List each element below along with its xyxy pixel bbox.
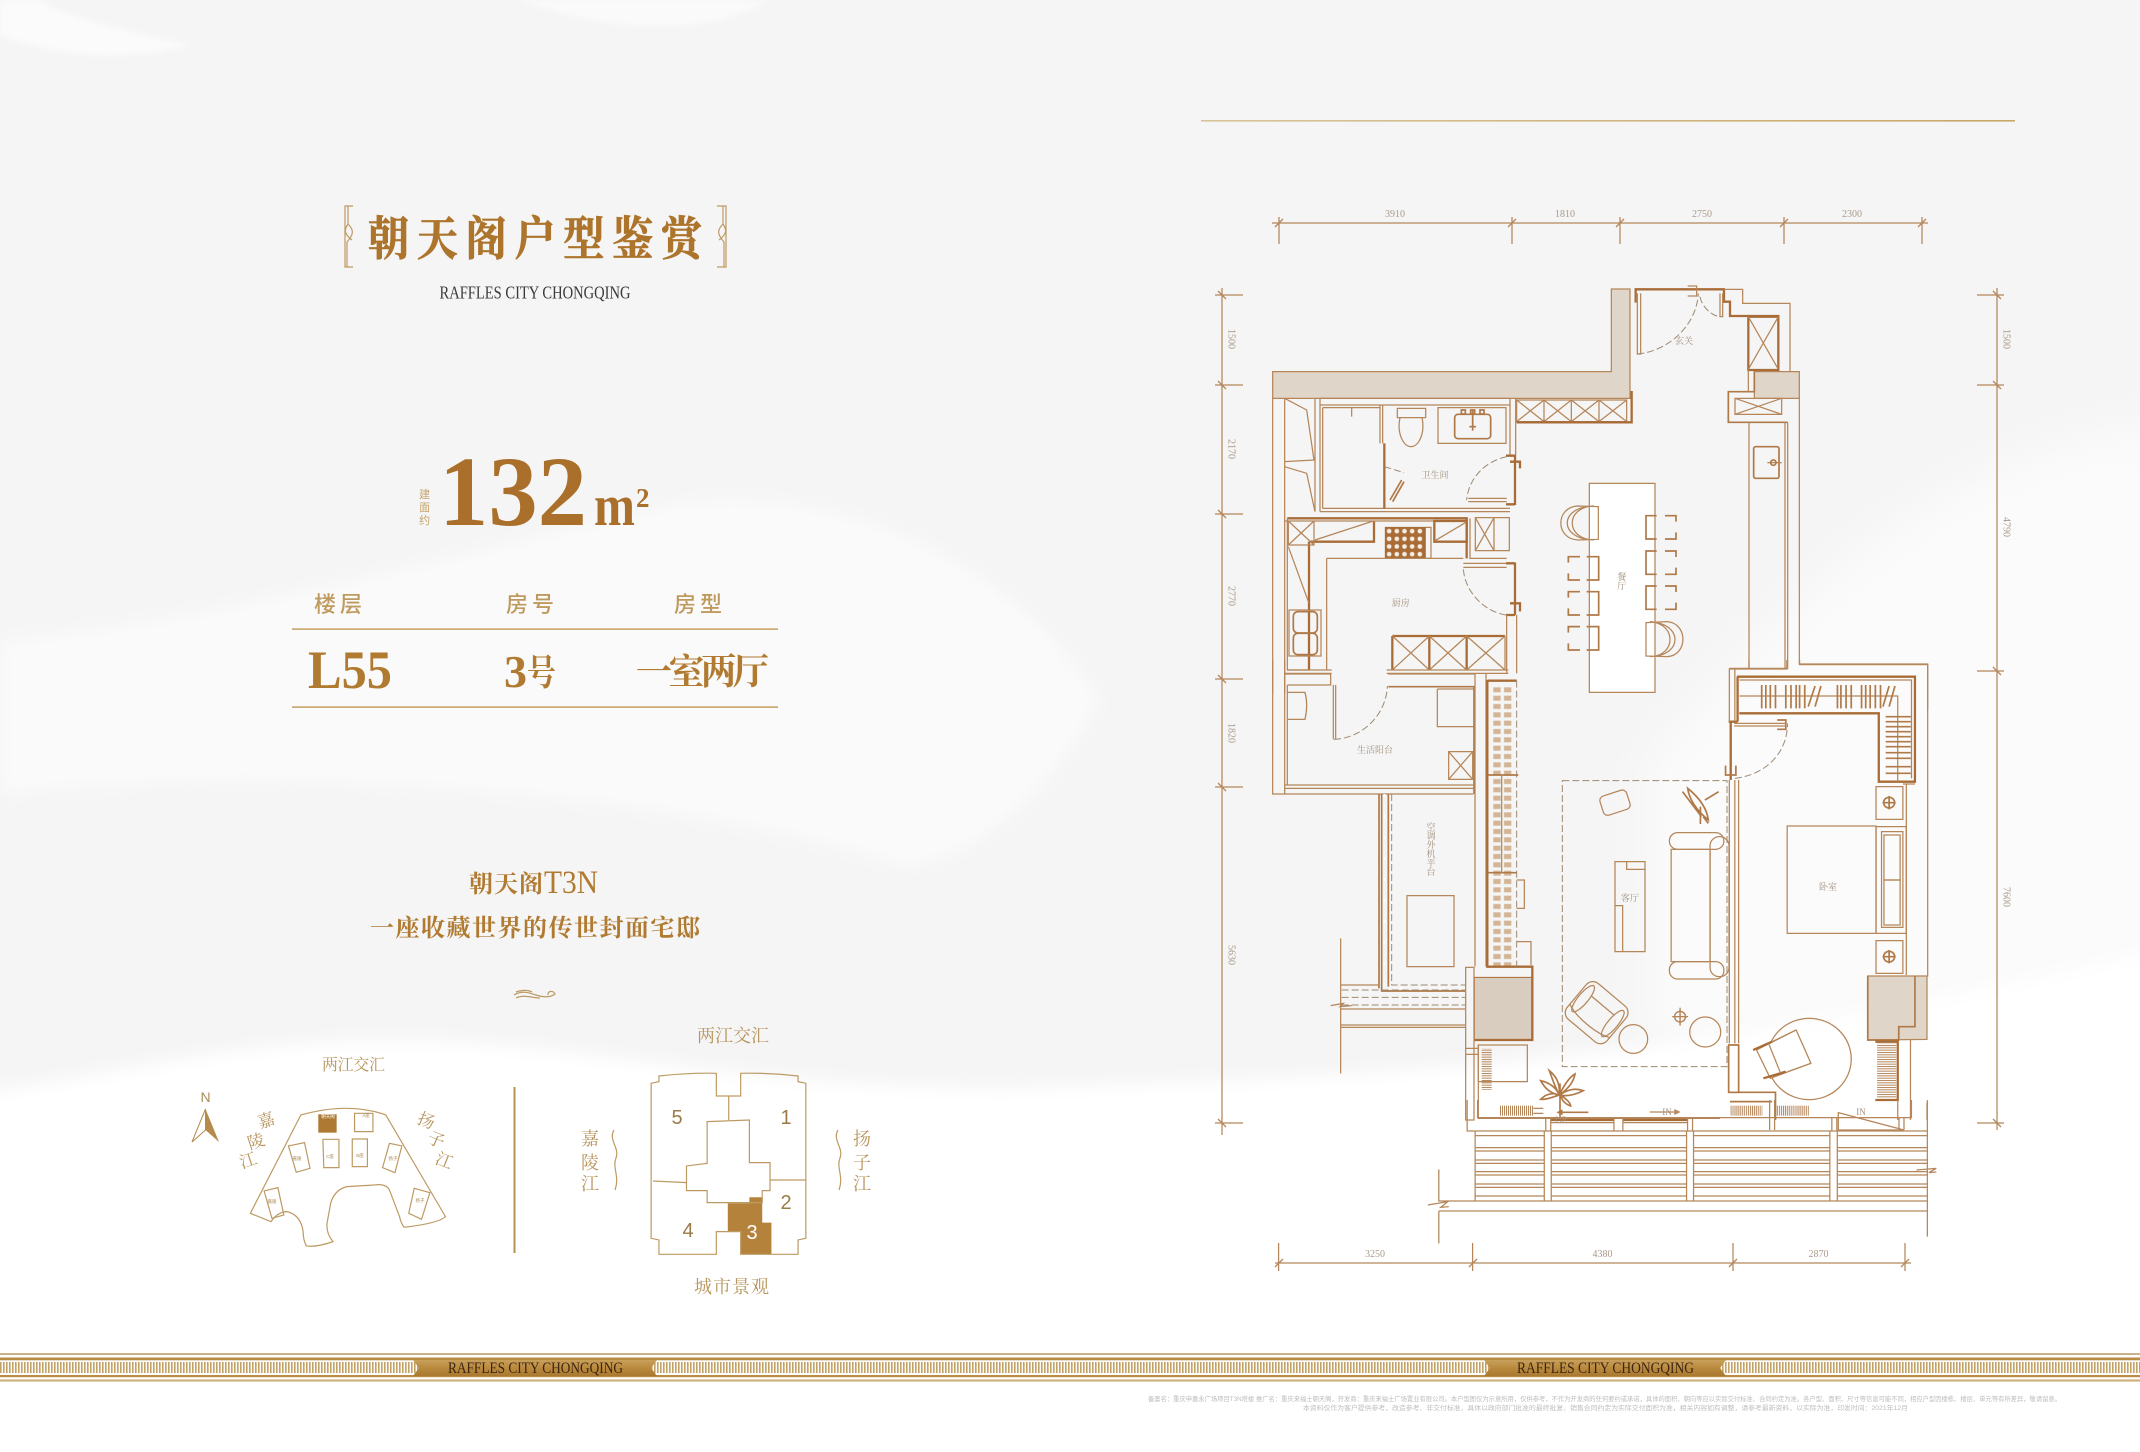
radiators and base wall xyxy=(1650,1040,1927,1120)
band plate left: RAFFLES CITY CHONGQING xyxy=(448,1360,623,1377)
right river label xyxy=(853,1128,871,1194)
dining chairs xyxy=(1561,506,1683,657)
cushion xyxy=(1599,789,1631,817)
room labels: 餐 xyxy=(1617,571,1626,582)
area caption xyxy=(419,487,430,527)
unit numbers: 2 xyxy=(780,1192,792,1214)
site building labels: 嘉陵 xyxy=(268,1198,277,1205)
room labels: 空 xyxy=(1426,821,1436,832)
title block xyxy=(345,206,726,302)
table headers xyxy=(314,592,722,617)
bottom dimensions: 3250 xyxy=(1365,1249,1385,1260)
lounge chair xyxy=(1753,1018,1851,1100)
subtitle: RAFFLES CITY CHONGQING xyxy=(440,282,630,302)
bedside tables xyxy=(1876,787,1903,973)
table headers: 楼层 xyxy=(314,592,362,617)
bathroom and kitchen xyxy=(1273,289,1632,693)
room labels: 台 xyxy=(1426,866,1436,877)
site building labels: A座 xyxy=(362,1112,370,1119)
shelf column xyxy=(1474,673,1532,1040)
site plan xyxy=(237,1056,456,1246)
floor plan xyxy=(1215,209,2012,1271)
right river label: 扬 xyxy=(853,1128,871,1149)
divider xyxy=(514,1087,516,1253)
area figure xyxy=(419,436,650,547)
river labels: 江 xyxy=(237,1149,259,1172)
unit numbers: 1 xyxy=(780,1107,792,1129)
table headers: 房号 xyxy=(506,592,554,617)
site building labels xyxy=(268,1112,425,1205)
left dimensions: 2170 xyxy=(1226,439,1236,459)
shaft xyxy=(1728,370,1799,422)
wall column xyxy=(1474,977,1532,1039)
view label: 城市景观 xyxy=(694,1277,769,1297)
bottom dimensions: 4380 xyxy=(1592,1249,1612,1260)
site building labels: C座 xyxy=(326,1153,334,1160)
tower label top: 两江交汇 xyxy=(697,1026,769,1046)
table values: 一室两厅 xyxy=(636,652,769,692)
ac platform xyxy=(1331,794,1478,1120)
left river label: 嘉 xyxy=(581,1129,599,1149)
site building labels: B座 xyxy=(356,1152,364,1159)
wardrobe xyxy=(1737,677,1915,782)
right river label: 子 xyxy=(853,1153,871,1173)
entrance xyxy=(1636,286,1790,372)
river waves xyxy=(612,1130,841,1190)
sliding doors xyxy=(1546,1118,1837,1131)
sofa xyxy=(1669,833,1729,979)
river labels: 陵 xyxy=(245,1130,267,1153)
table values: L55 xyxy=(308,640,392,700)
site building labels: 扬子 xyxy=(388,1155,398,1162)
coffee table xyxy=(1615,862,1645,952)
left dimensions xyxy=(1215,288,1243,1135)
title ornament: left bracket xyxy=(345,206,353,267)
room labels: UP xyxy=(1555,1115,1567,1125)
room labels: 玄关 xyxy=(1675,335,1693,346)
title: 朝天阁户型鉴赏 xyxy=(368,215,707,266)
right dimensions: 7600 xyxy=(2000,887,2012,907)
bottom dimensions xyxy=(1275,1243,1911,1271)
slogan: T3N xyxy=(544,865,598,901)
compass: N xyxy=(200,1089,211,1105)
right dimensions xyxy=(1977,288,2012,1130)
site outline xyxy=(250,1108,445,1246)
area unit: 2 xyxy=(636,483,650,513)
room labels: 调 xyxy=(1426,831,1436,841)
structural wall xyxy=(1273,289,1630,398)
room labels xyxy=(1357,335,1866,1125)
room labels: IN xyxy=(1662,1107,1672,1117)
utility balcony xyxy=(1273,660,1475,794)
terrace xyxy=(1428,1100,1936,1243)
left dimensions: 5630 xyxy=(1226,945,1236,965)
right dimensions: 4790 xyxy=(2000,517,2012,537)
slogan: 朝天阁 xyxy=(469,871,543,898)
left chase xyxy=(1273,398,1320,693)
disclaimer xyxy=(1148,1394,2061,1412)
unit numbers: 3 xyxy=(746,1222,758,1244)
room labels: 机 xyxy=(1426,848,1436,859)
footer band xyxy=(0,1353,2140,1382)
unit numbers: 5 xyxy=(671,1107,683,1129)
left river label: 陵 xyxy=(581,1153,599,1173)
band plate right: RAFFLES CITY CHONGQING xyxy=(1517,1360,1694,1377)
shoe rack xyxy=(1875,1042,1898,1100)
top dimensions: 3910 xyxy=(1385,209,1405,220)
kitchen xyxy=(1285,518,1520,673)
river labels: 子 xyxy=(425,1128,448,1152)
left river label xyxy=(581,1129,599,1194)
site building labels: 嘉陵 xyxy=(292,1155,302,1162)
area caption: 约 xyxy=(419,514,430,527)
room labels: 生活阳台 xyxy=(1357,744,1393,755)
wall column xyxy=(1868,976,1927,1040)
river labels: 嘉 xyxy=(255,1109,277,1132)
side table xyxy=(1619,1025,1648,1053)
info table xyxy=(292,592,778,708)
room labels: 卫生间 xyxy=(1421,469,1449,480)
right river label: 江 xyxy=(853,1174,871,1194)
terrace frame xyxy=(1428,1100,1927,1243)
unit numbers: 4 xyxy=(682,1220,694,1242)
left dimensions: 2770 xyxy=(1226,586,1236,606)
bottom dimensions: 2870 xyxy=(1808,1249,1828,1260)
slogan: 一座收藏世界的传世封面宅邸 xyxy=(370,915,700,942)
area caption: 建 xyxy=(419,487,430,501)
living rug xyxy=(1562,781,1727,1067)
bed xyxy=(1787,784,1915,975)
table values: 号 xyxy=(527,653,556,694)
top dimensions: 2750 xyxy=(1692,209,1712,220)
top dimensions xyxy=(1272,209,1928,244)
disclaimer: 备案名：重庆申嘉永广场项目T3N塔楼 推广名：重庆来福士朝天阁，开发商：重庆来福士广场置业有限公司。本户型图仅为示意所用，仅供参考，不作为开发商的任何要约或承诺，具体的面积、朝向等应以实际交付标准、合同约定为准。各户型、面积、尺寸等信息可能不同，相应户型因楼栋、楼层、单元等有所差异，敬请留意。 xyxy=(1148,1394,2061,1403)
room labels: 厨房 xyxy=(1392,597,1410,608)
table headers: 房型 xyxy=(674,592,722,617)
floor lamp xyxy=(1672,1008,1688,1026)
living room and bedroom xyxy=(1650,660,1928,1120)
ornament xyxy=(514,990,555,998)
river labels: 扬 xyxy=(415,1108,438,1133)
right dimensions: 1500 xyxy=(2000,329,2012,349)
site building labels: 朝天阁 xyxy=(321,1113,335,1120)
partition wall xyxy=(1726,660,1928,1092)
slogan xyxy=(370,865,700,942)
entry and dining xyxy=(1561,286,1928,710)
stair xyxy=(1838,1113,1904,1130)
river labels: 江 xyxy=(433,1149,456,1173)
room labels: 厅 xyxy=(1617,581,1626,591)
top dimensions: 2300 xyxy=(1842,209,1862,220)
room labels: 客厅 xyxy=(1621,892,1639,903)
table values: 3 xyxy=(504,646,527,697)
side table xyxy=(1690,1017,1721,1047)
radiator and plant xyxy=(1478,1045,1720,1118)
lamp xyxy=(1673,1008,1687,1025)
bathroom xyxy=(1320,398,1520,512)
tower key plan xyxy=(581,1026,871,1297)
top dimensions: 1810 xyxy=(1555,209,1575,220)
unit numbers xyxy=(671,1107,792,1244)
left dimensions: 1500 xyxy=(1226,329,1236,349)
site building labels: 扬子 xyxy=(416,1197,425,1204)
left river label: 江 xyxy=(581,1174,599,1194)
title ornament: right bracket xyxy=(717,206,726,267)
river labels xyxy=(237,1108,456,1173)
disclaimer: 本资料仅作为客户提供参考，改造参考、非交付标准，具体以政府部门批准的最终批复、销售合同约定为实际交付面积为准，相关内容如有调整，请参考最新资料，以实际为准，印发时间：2021年12月 xyxy=(1303,1403,1908,1412)
room labels: 外 xyxy=(1426,839,1436,850)
compass xyxy=(192,1089,219,1142)
balcony, platform and shelves xyxy=(1273,660,1727,1120)
area caption: 面 xyxy=(419,502,430,514)
floor lamp xyxy=(1683,788,1719,824)
site label: 两江交汇 xyxy=(322,1056,385,1074)
long wall xyxy=(1729,398,1928,710)
room labels: 卧室 xyxy=(1819,881,1837,892)
armchair xyxy=(1562,978,1632,1047)
room labels: IN xyxy=(1856,1107,1866,1117)
tower outline xyxy=(651,1073,806,1254)
table values xyxy=(308,640,769,700)
deck boards xyxy=(1475,1131,1936,1201)
storage cabinets xyxy=(1517,391,1632,422)
area number: 132 xyxy=(439,436,587,547)
top gold rule xyxy=(1201,120,2015,122)
room labels: 平 xyxy=(1426,858,1436,868)
dining table xyxy=(1589,483,1655,692)
left dimensions: 1820 xyxy=(1226,723,1236,743)
area unit: m xyxy=(594,473,635,538)
